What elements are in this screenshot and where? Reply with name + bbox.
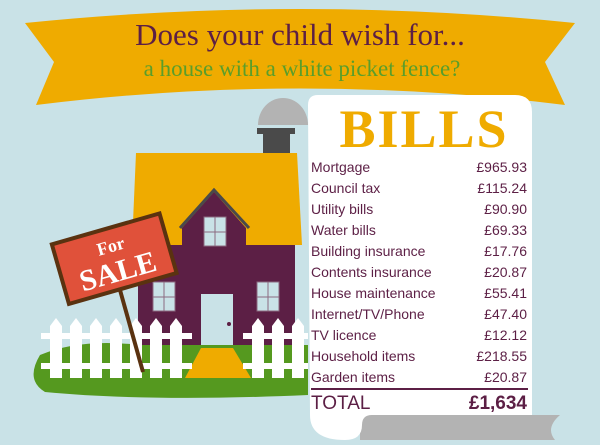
windows [153, 217, 279, 311]
title: Does your child wish for... [135, 17, 465, 52]
bills list: Utility bills [311, 201, 373, 217]
total [311, 393, 527, 414]
for sale sign: SALE [76, 245, 160, 298]
bills list: Internet/TV/Phone [311, 306, 425, 322]
bills list: £965.93 [476, 159, 527, 175]
total: £1,634 [469, 393, 527, 414]
bills list: £20.87 [484, 369, 527, 385]
bills list: Household items [311, 348, 415, 364]
fence [41, 318, 308, 378]
subtitle: a house with a white picket fence? [144, 56, 460, 81]
bills list: TV licence [311, 327, 377, 343]
total: TOTAL [311, 393, 370, 414]
banner [25, 9, 575, 105]
chimney [257, 128, 295, 154]
bills list [311, 159, 527, 385]
bills heading: BILLS [339, 99, 509, 159]
for sale sign [52, 213, 177, 372]
bills list: £47.40 [484, 306, 527, 322]
house body [138, 190, 295, 350]
bills scroll [258, 95, 560, 440]
bills list: Contents insurance [311, 264, 432, 280]
bills list: Water bills [311, 222, 376, 238]
bills list: Mortgage [311, 159, 370, 175]
bills list: House maintenance [311, 285, 436, 301]
door [201, 294, 233, 349]
bills list: Council tax [311, 180, 380, 196]
bills list: £55.41 [484, 285, 527, 301]
path [185, 348, 251, 378]
bills list: £20.87 [484, 264, 527, 280]
for sale sign: For [94, 233, 127, 260]
bills list: £12.12 [484, 327, 527, 343]
bills list: £90.90 [484, 201, 527, 217]
bills list: £69.33 [484, 222, 527, 238]
bills list: Garden items [311, 369, 395, 385]
bills list: £115.24 [477, 180, 527, 196]
house illustration [34, 128, 308, 398]
bills list: £17.76 [484, 243, 527, 259]
bills list: £218.55 [476, 348, 527, 364]
grass [34, 343, 308, 398]
bills list: Building insurance [311, 243, 426, 259]
roof [132, 153, 302, 245]
